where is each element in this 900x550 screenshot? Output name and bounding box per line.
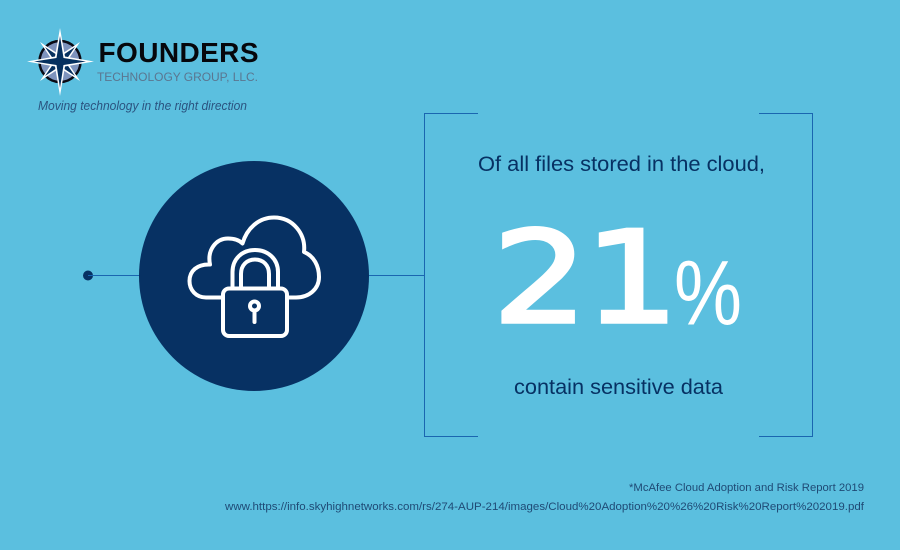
icon: compass star — [27, 28, 94, 96]
source citation: *McAfee Cloud Adoption and Risk Report 2019 — [629, 482, 864, 494]
heading text: Of all files stored in the cloud, — [478, 152, 765, 176]
logo — [27, 28, 258, 113]
source citation: www.https://info.skyhighnetworks.com/rs/274-AUP-214/images/Cloud%20Adoption%20%26%20Risk%20Report%202019.pdf — [224, 501, 865, 513]
digit 2: 2 — [492, 204, 588, 352]
percent sign: % — [674, 242, 742, 344]
digit 1: 1 — [584, 204, 679, 352]
icon: cloud with padlock — [190, 218, 319, 336]
logo wordmark: FOUNDERS — [98, 37, 258, 68]
bracket frame — [424, 114, 812, 436]
subheading text: contain sensitive data — [514, 375, 723, 399]
source citation — [224, 482, 865, 513]
logo subtitle: TECHNOLOGY GROUP, LLC. — [97, 70, 258, 84]
connector line with dot — [83, 270, 424, 280]
statistic 21% — [492, 204, 742, 352]
dark circle with icon — [139, 161, 369, 391]
tagline: Moving technology in the right direction — [38, 99, 247, 113]
